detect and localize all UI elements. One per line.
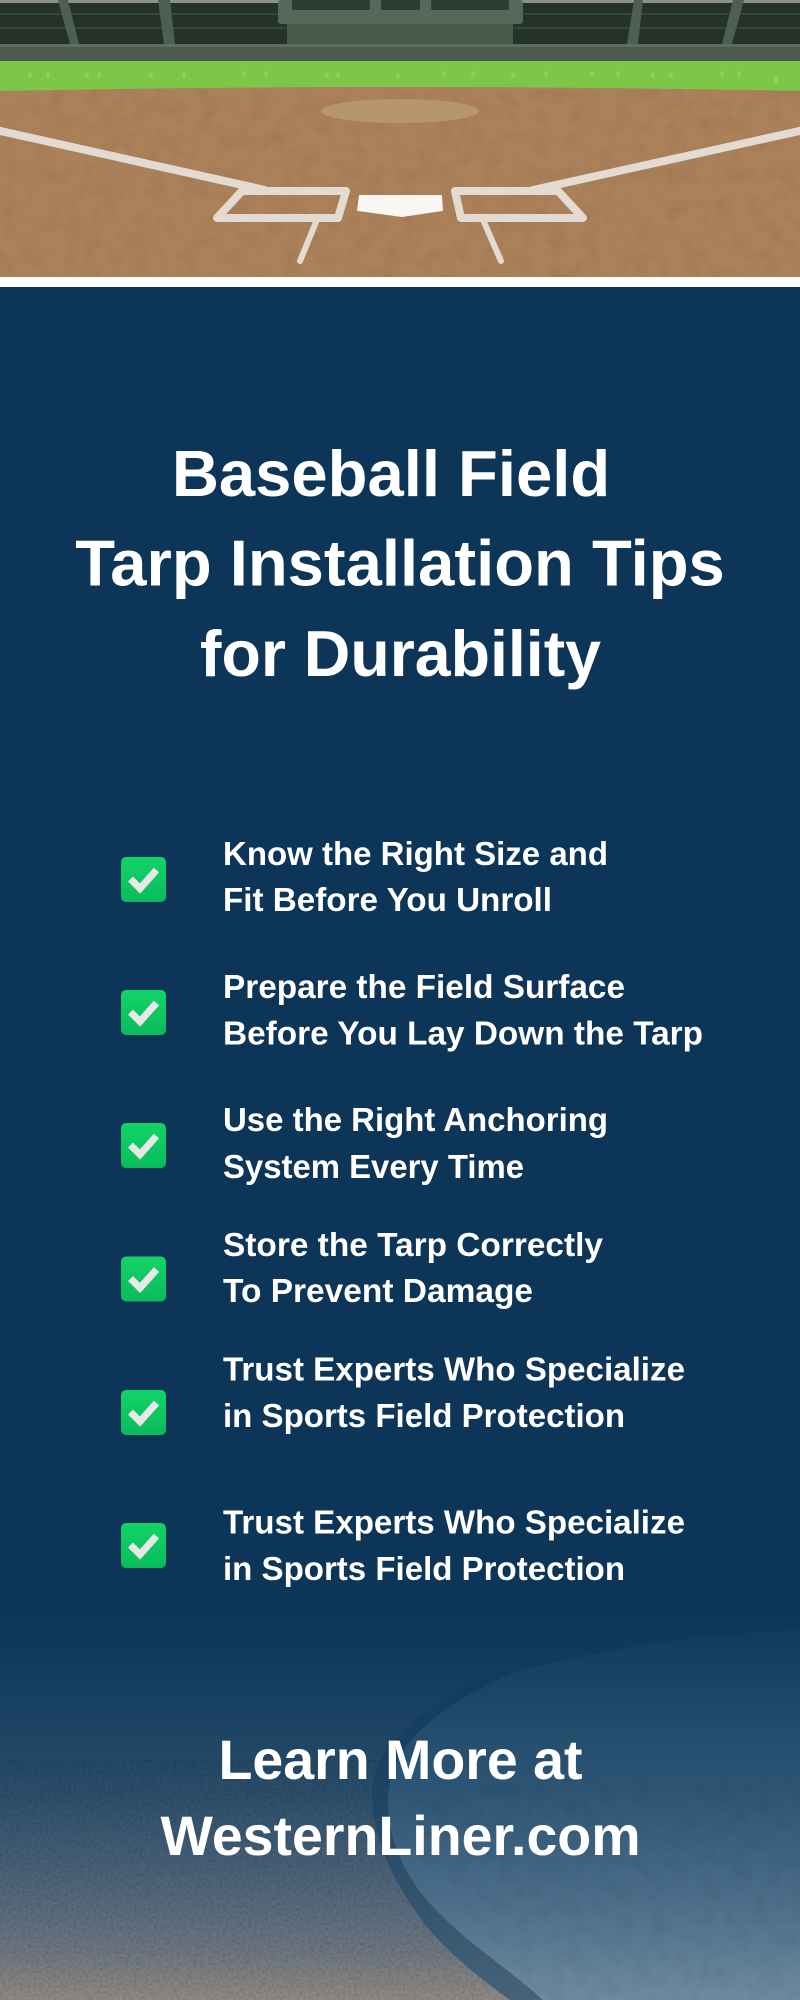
call to action: WesternLiner.com — [160, 1805, 641, 1867]
item 5 — [121, 1352, 685, 1435]
item 6 — [121, 1504, 685, 1588]
grass strip — [0, 61, 800, 93]
item 2 text: Prepare the Field Surface — [223, 969, 625, 1006]
press box — [278, 0, 523, 46]
item 6 text: Trust Experts Who Specialize — [223, 1504, 685, 1542]
item 3 text: System Every Time — [223, 1149, 524, 1186]
title: Tarp Installation Tips — [75, 526, 725, 600]
item 1 — [121, 836, 608, 919]
item 5 text: in Sports Field Protection — [223, 1398, 625, 1435]
title: for Durability — [200, 617, 601, 690]
item 2 — [121, 969, 703, 1052]
checklist — [121, 836, 703, 1588]
footer photo: tarp over dirt, fading into navy — [0, 1643, 800, 2000]
title — [75, 437, 725, 690]
item 2 text — [223, 969, 703, 1052]
call to action: Learn More at — [219, 1729, 582, 1791]
item 6 text — [223, 1504, 685, 1588]
dirt texture — [0, 90, 800, 277]
item 4 — [121, 1227, 604, 1310]
icon: green check — [121, 857, 166, 902]
item 2 text: Before You Lay Down the Tarp — [223, 1016, 703, 1052]
tarp texture — [400, 1780, 800, 2000]
item 1 text: Know the Right Size and — [223, 836, 608, 873]
item 1 text — [223, 836, 608, 919]
item 4 text: Store the Tarp Correctly — [223, 1227, 604, 1264]
item 5 text: Trust Experts Who Specialize — [223, 1352, 685, 1388]
grandstand seating — [0, 0, 800, 46]
item 1 text: Fit Before You Unroll — [223, 882, 552, 919]
item 3 — [121, 1102, 608, 1186]
home plate — [358, 196, 442, 216]
item 3 text — [223, 1102, 608, 1186]
sand texture — [0, 1760, 520, 2000]
item 4 text — [223, 1227, 604, 1310]
icon: green check — [121, 1390, 166, 1435]
outfield wall — [0, 44, 800, 61]
item 4 text: To Prevent Damage — [223, 1273, 533, 1310]
item 3 text: Use the Right Anchoring — [223, 1102, 608, 1139]
header illustration: baseball field — [0, 0, 800, 287]
call to action — [160, 1729, 641, 1867]
item 5 text — [223, 1352, 685, 1435]
icon: green check — [121, 1523, 166, 1568]
item 6 text: in Sports Field Protection — [223, 1551, 625, 1588]
pitcher's mound — [321, 99, 479, 123]
tarp edge band — [372, 1628, 800, 2000]
title: Baseball Field — [172, 437, 610, 510]
icon: green check — [121, 1123, 166, 1168]
tarp — [388, 1630, 800, 2000]
infield dirt — [0, 87, 800, 277]
foul lines and batter's boxes — [0, 130, 800, 261]
icon: green check — [121, 1256, 166, 1302]
icon: green check — [121, 990, 166, 1035]
